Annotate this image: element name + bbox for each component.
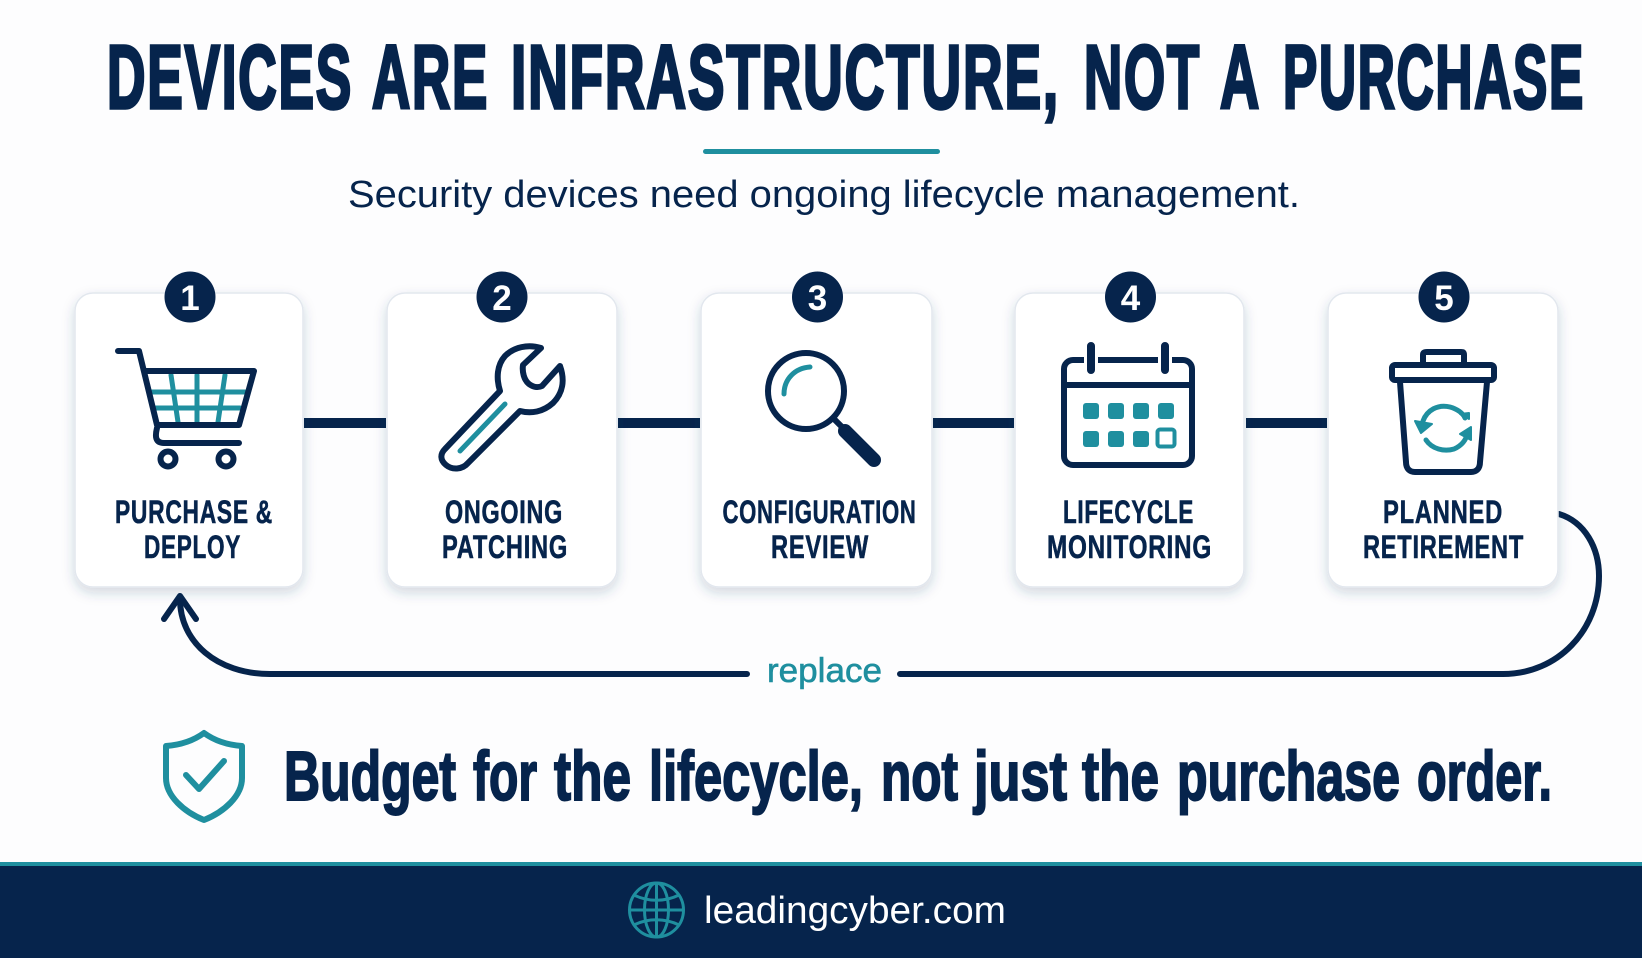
panel: step 2 ongoing patching — [387, 272, 617, 587]
badge 5 — [1418, 272, 1470, 322]
panel: step 1 purchase and deploy — [75, 272, 303, 587]
title: DEVICES — [107, 28, 353, 128]
takeaway statement — [284, 737, 1552, 815]
label — [722, 494, 916, 565]
label: MONITORING — [1047, 529, 1212, 565]
title: A — [1220, 28, 1261, 128]
label: ONGOING — [445, 494, 563, 530]
icon: globe — [630, 883, 684, 937]
badge 1 — [164, 272, 216, 322]
label: CONFIGURATION — [722, 494, 916, 530]
icon: magnifying glass — [768, 353, 874, 460]
badge 4: 4 — [1121, 279, 1141, 318]
icon: wrench — [441, 346, 563, 469]
panel: step 3 configuration review — [701, 272, 932, 587]
footer band — [0, 862, 1642, 958]
icon: recycling bin — [1392, 352, 1494, 472]
title: NOT — [1084, 28, 1201, 128]
label: PLANNED — [1383, 494, 1503, 530]
icon: shopping cart — [118, 351, 254, 466]
takeaway statement: purchase — [1177, 737, 1400, 815]
replace label: replace — [767, 652, 882, 690]
badge 3: 3 — [808, 279, 827, 318]
badge 3 — [792, 272, 843, 322]
takeaway statement: not — [881, 737, 958, 815]
label — [115, 494, 273, 565]
takeaway statement: the — [554, 737, 631, 815]
label — [442, 494, 568, 565]
icon: calendar — [1064, 346, 1192, 465]
badge 5: 5 — [1434, 279, 1454, 318]
connector lines between steps — [304, 418, 1327, 428]
title — [107, 28, 1585, 128]
takeaway statement: order. — [1417, 737, 1552, 815]
takeaway statement: lifecycle, — [649, 737, 863, 815]
panel: step 4 lifecycle monitoring — [1015, 272, 1244, 587]
title underline — [703, 149, 940, 154]
takeaway statement: the — [1082, 737, 1159, 815]
takeaway statement: for — [473, 737, 537, 815]
title: ARE — [372, 28, 489, 128]
label: LIFECYCLE — [1063, 494, 1194, 530]
takeaway statement: Budget — [284, 737, 456, 815]
panel: step 5 planned retirement — [1328, 272, 1558, 587]
website address: leadingcyber.com — [704, 890, 1006, 932]
badge 2 — [476, 272, 528, 322]
label: PATCHING — [442, 529, 568, 565]
label: REVIEW — [771, 529, 869, 565]
label: DEPLOY — [144, 529, 241, 565]
badge 1: 1 — [180, 279, 200, 318]
badge 4 — [1105, 272, 1156, 322]
label — [1047, 494, 1212, 565]
label: RETIREMENT — [1363, 529, 1524, 565]
label — [1363, 494, 1524, 565]
badge 2: 2 — [492, 279, 512, 318]
return arrow: replace loop — [164, 514, 1599, 674]
label: PURCHASE & — [115, 494, 273, 530]
icon: shield with check — [166, 733, 242, 820]
subtitle: Security devices need ongoing lifecycle management. — [348, 174, 1300, 216]
title: INFRASTRUCTURE, — [511, 28, 1060, 128]
takeaway statement: just — [973, 737, 1067, 815]
